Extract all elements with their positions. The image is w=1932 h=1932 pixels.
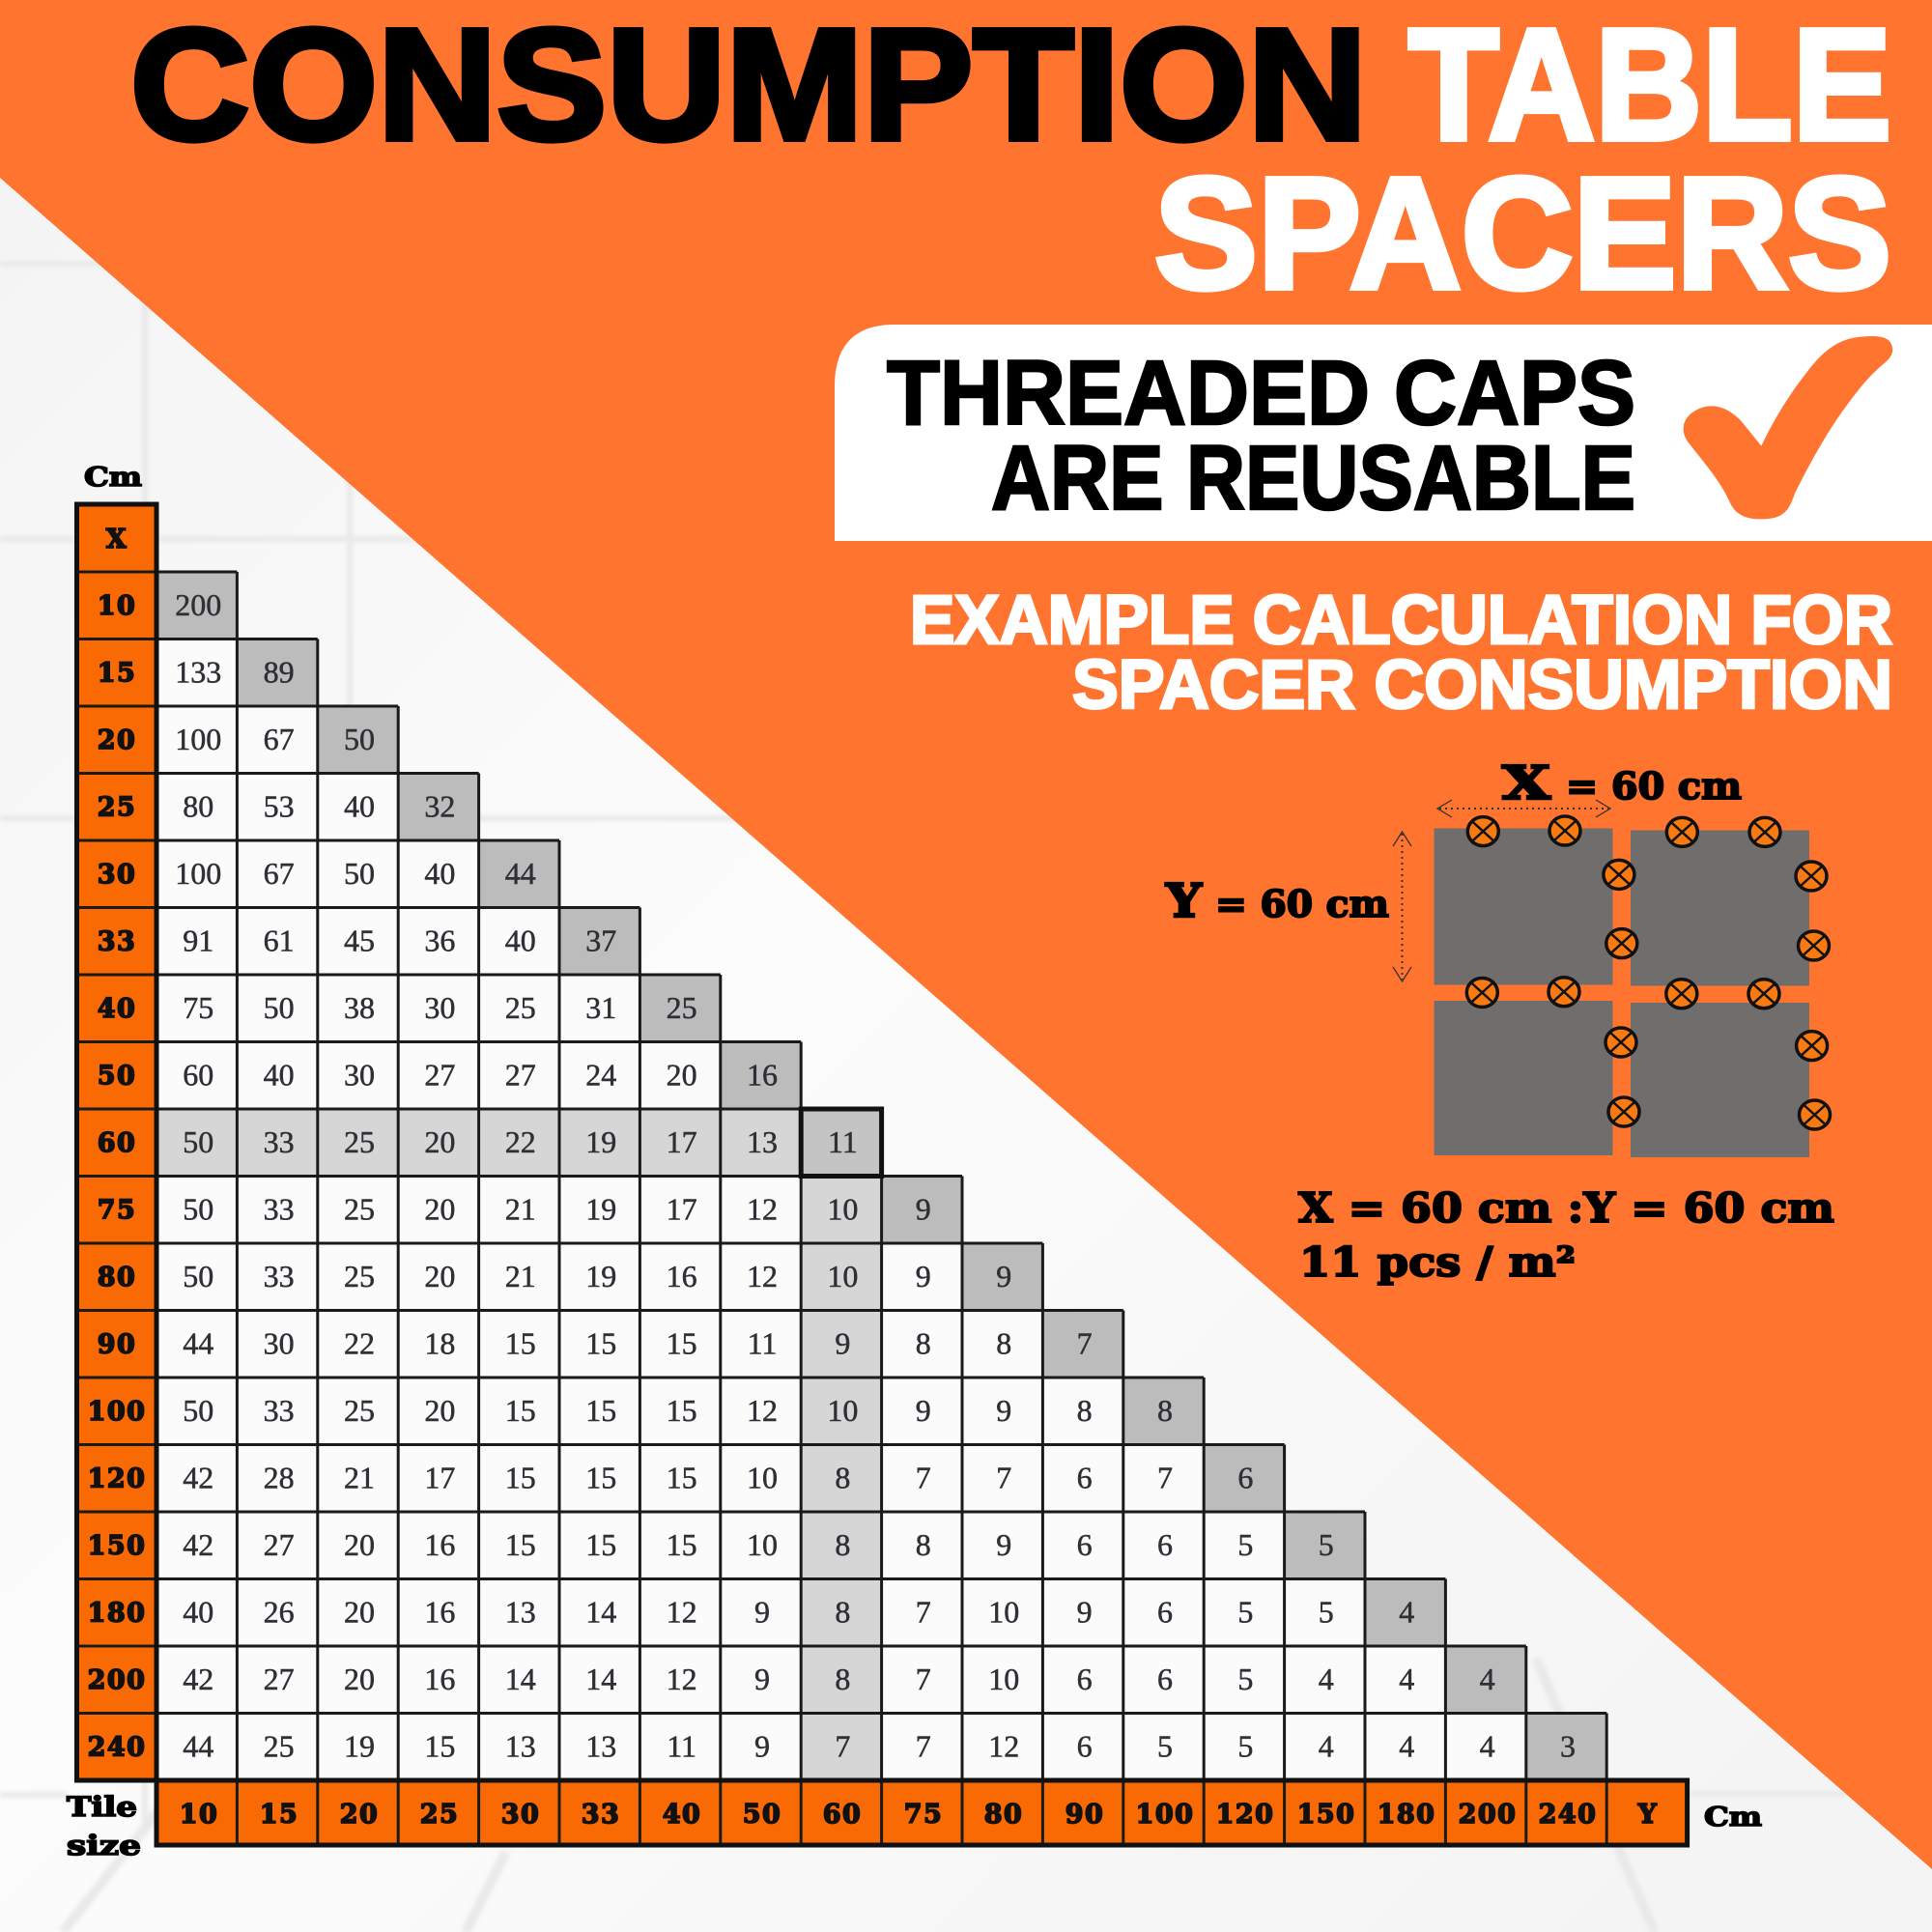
label: Y equals 60 cm: = 60 cm [1215, 882, 1389, 925]
table values: 17 [667, 1124, 697, 1159]
table values: 67 [264, 722, 295, 756]
table values: 5 [1237, 1662, 1253, 1696]
table values: 50 [183, 1124, 213, 1159]
table values: 9 [916, 1259, 931, 1293]
table values: 45 [344, 923, 375, 958]
row header column X: 180 [88, 1598, 146, 1629]
table values: 8 [1157, 1393, 1173, 1428]
table values: 5 [1319, 1527, 1334, 1562]
row header column X: 30 [98, 860, 136, 890]
table values: 42 [183, 1527, 213, 1562]
column header row Y: 10 [180, 1800, 218, 1830]
label: tile size [67, 1791, 141, 1861]
table values: 14 [585, 1594, 616, 1629]
column header row Y: 100 [1136, 1800, 1194, 1830]
table values: 25 [344, 1124, 375, 1159]
label: Cm right: Cm [1704, 1803, 1762, 1833]
table values: 9 [996, 1527, 1011, 1562]
table values: 75 [183, 990, 213, 1025]
row header column X: 90 [98, 1329, 136, 1360]
table values: 10 [988, 1662, 1019, 1696]
table values: 8 [1077, 1393, 1093, 1428]
table values: 15 [424, 1729, 455, 1764]
arrow: X dimension [1437, 800, 1610, 817]
table values: 16 [424, 1594, 455, 1629]
table values: 4 [1480, 1662, 1495, 1696]
table values: 20 [344, 1527, 375, 1562]
cell fills [156, 572, 1606, 1780]
label: tile size: Tile [67, 1791, 137, 1823]
table values [175, 587, 1576, 1764]
callout: threaded caps are reusable: THREADED CAPS [887, 342, 1635, 444]
table values: 15 [667, 1527, 697, 1562]
title: SPACERS [1154, 145, 1891, 322]
table values: 8 [835, 1527, 850, 1562]
table values: 13 [505, 1594, 536, 1629]
table values: 25 [344, 1393, 375, 1428]
row header column X: 200 [88, 1665, 146, 1695]
table values: 11 [748, 1325, 777, 1360]
table values: 6 [1237, 1461, 1253, 1495]
table values: 8 [835, 1594, 850, 1629]
table values: 6 [1077, 1729, 1093, 1764]
table values: 19 [585, 1259, 616, 1293]
table values: 16 [424, 1662, 455, 1696]
table values: 7 [996, 1461, 1011, 1495]
table values: 22 [505, 1124, 536, 1159]
title [130, 0, 1891, 322]
table values: 40 [424, 856, 455, 891]
row header column X: 40 [98, 994, 136, 1024]
table values: 40 [344, 788, 375, 823]
table values: 27 [264, 1527, 295, 1562]
table values: 9 [754, 1594, 770, 1629]
table values: 9 [835, 1325, 850, 1360]
table values: 4 [1399, 1662, 1414, 1696]
row header column X [76, 504, 156, 1780]
table values: 9 [754, 1729, 770, 1764]
row header column X: 240 [88, 1733, 146, 1762]
table values: 19 [585, 1192, 616, 1227]
title: TABLE [1408, 0, 1891, 173]
table values: 5 [1237, 1594, 1253, 1629]
table values: 15 [585, 1325, 616, 1360]
table values: 15 [585, 1527, 616, 1562]
table values: 4 [1319, 1729, 1334, 1764]
column header row Y: 15 [260, 1800, 298, 1830]
table values: 9 [1077, 1594, 1093, 1629]
row header column X: 20 [98, 725, 136, 755]
row header column X: 33 [98, 927, 136, 956]
table values: 25 [344, 1259, 375, 1293]
result: 11 pieces per square metre: X = 60 cm :Y = 60 cm [1298, 1184, 1834, 1232]
arrow: Y dimension [1393, 832, 1411, 981]
table values: 11 [667, 1729, 696, 1764]
table values: 33 [264, 1192, 295, 1227]
table values: 44 [505, 856, 536, 891]
table values: 67 [264, 856, 295, 891]
table values: 50 [344, 722, 375, 756]
table values: 91 [183, 923, 213, 958]
table values: 30 [344, 1057, 375, 1092]
table values: 33 [264, 1124, 295, 1159]
grid lines [156, 572, 1606, 1780]
table values: 20 [424, 1192, 455, 1227]
table values: 14 [585, 1662, 616, 1696]
title: CONSUMPTION [130, 0, 1367, 173]
table values: 38 [344, 990, 375, 1025]
table values: 13 [585, 1729, 616, 1764]
label: Y equals 60 cm: Y [1165, 874, 1203, 928]
table values: 5 [1237, 1527, 1253, 1562]
row header column X: 75 [98, 1196, 136, 1225]
table values: 6 [1157, 1594, 1173, 1629]
column header row Y: 33 [582, 1800, 620, 1830]
table values: 31 [585, 990, 616, 1025]
table values: 13 [505, 1729, 536, 1764]
spacer markers [1466, 816, 1830, 1129]
table values: 26 [264, 1594, 295, 1629]
table values: 15 [505, 1527, 536, 1562]
table values: 7 [916, 1729, 931, 1764]
table values: 3 [1560, 1729, 1576, 1764]
table values: 8 [996, 1325, 1011, 1360]
table values: 12 [747, 1393, 778, 1428]
table values: 10 [827, 1192, 858, 1227]
table values: 16 [424, 1527, 455, 1562]
table values: 20 [344, 1594, 375, 1629]
table values: 7 [916, 1461, 931, 1495]
column header row Y: 60 [823, 1800, 862, 1830]
table values: 12 [988, 1729, 1019, 1764]
column header row Y: 20 [340, 1800, 379, 1830]
table values: 12 [747, 1259, 778, 1293]
table values: 40 [264, 1057, 295, 1092]
tiles [1434, 829, 1809, 1157]
table values: 7 [1157, 1461, 1173, 1495]
table values: 89 [264, 655, 295, 690]
table values: 16 [747, 1057, 778, 1092]
table values: 7 [1077, 1325, 1093, 1360]
table values: 15 [505, 1325, 536, 1360]
diagram: spacer layout on four tiles [1165, 756, 1830, 1157]
table values: 4 [1399, 1594, 1414, 1629]
table values: 8 [835, 1662, 850, 1696]
row header column X: 100 [88, 1397, 146, 1427]
table values: 19 [585, 1124, 616, 1159]
table values: 8 [916, 1325, 931, 1360]
table values: 42 [183, 1662, 213, 1696]
table values: 9 [996, 1259, 1011, 1293]
table values: 37 [585, 923, 616, 958]
table values: 9 [916, 1393, 931, 1428]
table values: 6 [1077, 1461, 1093, 1495]
table values: 50 [264, 990, 295, 1025]
column header row Y: 90 [1065, 1800, 1104, 1830]
row header column X: 60 [98, 1128, 136, 1158]
table values: 10 [747, 1461, 778, 1495]
table values: 50 [183, 1192, 213, 1227]
result: 11 pieces per square metre [1298, 1184, 1834, 1286]
table values: 16 [667, 1259, 697, 1293]
heading: example calculation: SPACER CONSUMPTION [1072, 647, 1892, 724]
table values: 42 [183, 1461, 213, 1495]
row header column X: 80 [98, 1263, 136, 1293]
table values: 27 [424, 1057, 455, 1092]
table values: 9 [996, 1393, 1011, 1428]
table values: 61 [264, 923, 295, 958]
table values: 4 [1319, 1662, 1334, 1696]
table values: 100 [175, 856, 221, 891]
label: Y equals 60 cm [1165, 874, 1389, 928]
table values: 44 [183, 1325, 213, 1360]
table values: 12 [747, 1192, 778, 1227]
row header column X: 120 [88, 1464, 146, 1493]
table values: 30 [424, 990, 455, 1025]
label: X equals 60 cm: = 60 cm [1566, 764, 1742, 808]
table values: 33 [264, 1259, 295, 1293]
table values: 80 [183, 788, 213, 823]
table values: 25 [264, 1729, 295, 1764]
row header column X: 10 [98, 591, 136, 621]
column header row Y: 240 [1539, 1800, 1597, 1830]
table values: 20 [424, 1393, 455, 1428]
column header row Y: 50 [743, 1800, 781, 1830]
table values: 10 [827, 1259, 858, 1293]
table values: 8 [916, 1527, 931, 1562]
table values: 36 [424, 923, 455, 958]
row header column X: X [106, 525, 128, 554]
table values: 5 [1237, 1729, 1253, 1764]
column header row Y: 200 [1459, 1800, 1517, 1830]
callout: threaded caps are reusable: ARE REUSABLE [991, 427, 1635, 529]
table values: 15 [505, 1393, 536, 1428]
table values: 17 [424, 1461, 455, 1495]
table values: 27 [505, 1057, 536, 1092]
table values: 12 [667, 1662, 697, 1696]
table values: 32 [424, 788, 455, 823]
table values: 25 [667, 990, 697, 1025]
table values: 10 [827, 1393, 858, 1428]
table values: 21 [344, 1461, 375, 1495]
table values: 44 [183, 1729, 213, 1764]
table values: 10 [747, 1527, 778, 1562]
column header row Y: 30 [501, 1800, 540, 1830]
highlighted cell: 60 by 60 [801, 1109, 882, 1177]
table values: 19 [344, 1729, 375, 1764]
table values: 15 [585, 1393, 616, 1428]
table values: 5 [1157, 1729, 1173, 1764]
row header column X: 15 [98, 659, 136, 688]
column header row Y: 25 [420, 1800, 459, 1830]
label: X equals 60 cm: X [1502, 756, 1551, 810]
table values: 40 [505, 923, 536, 958]
heading: example calculation [910, 582, 1892, 724]
table values: 25 [344, 1192, 375, 1227]
table values: 4 [1399, 1729, 1414, 1764]
row header column X: 150 [88, 1531, 146, 1561]
table values: 15 [585, 1461, 616, 1495]
table values: 15 [667, 1461, 697, 1495]
table values: 200 [175, 587, 221, 622]
table values: 10 [988, 1594, 1019, 1629]
table values: 14 [505, 1662, 536, 1696]
table values: 4 [1480, 1729, 1495, 1764]
column header row Y: 40 [663, 1800, 701, 1830]
row header column X: 25 [98, 792, 136, 823]
table values: 13 [747, 1124, 778, 1159]
table values: 5 [1319, 1594, 1334, 1629]
column header row Y: 180 [1378, 1800, 1435, 1830]
table values: 20 [344, 1662, 375, 1696]
table values: 7 [916, 1594, 931, 1629]
table values: 27 [264, 1662, 295, 1696]
table values: 11 [828, 1124, 858, 1159]
column header row Y: 120 [1216, 1800, 1274, 1830]
table values: 50 [183, 1393, 213, 1428]
table values: 33 [264, 1393, 295, 1428]
table values: 53 [264, 788, 295, 823]
table values: 21 [505, 1192, 536, 1227]
table values: 7 [835, 1729, 850, 1764]
table values: 20 [424, 1259, 455, 1293]
table values: 20 [667, 1057, 697, 1092]
consumption table [76, 504, 1688, 1845]
table values: 40 [183, 1594, 213, 1629]
label: Cm top: Cm [84, 463, 142, 493]
column header row Y: 150 [1297, 1800, 1355, 1830]
table values: 22 [344, 1325, 375, 1360]
label: tile size: size [67, 1830, 141, 1861]
table values: 15 [505, 1461, 536, 1495]
callout: threaded caps are reusable [835, 325, 1932, 541]
table values: 6 [1157, 1527, 1173, 1562]
table values: 24 [585, 1057, 616, 1092]
table values: 9 [754, 1662, 770, 1696]
table values: 15 [667, 1393, 697, 1428]
table values: 133 [175, 655, 221, 690]
table values: 60 [183, 1057, 213, 1092]
table values: 9 [916, 1192, 931, 1227]
table values: 30 [264, 1325, 295, 1360]
table values: 50 [183, 1259, 213, 1293]
table values: 6 [1077, 1527, 1093, 1562]
label: X equals 60 cm [1502, 756, 1742, 810]
table values: 50 [344, 856, 375, 891]
table values: 100 [175, 722, 221, 756]
column header row Y: Y [1637, 1800, 1658, 1830]
result: 11 pieces per square metre: 11 pcs / m² [1299, 1238, 1576, 1286]
table values: 12 [667, 1594, 697, 1629]
table values: 15 [667, 1325, 697, 1360]
column header row Y [156, 1780, 1688, 1845]
table values: 7 [916, 1662, 931, 1696]
column header row Y: 75 [904, 1800, 943, 1830]
table values: 25 [505, 990, 536, 1025]
table values: 17 [667, 1192, 697, 1227]
table values: 21 [505, 1259, 536, 1293]
table values: 18 [424, 1325, 455, 1360]
table values: 28 [264, 1461, 295, 1495]
column header row Y: 80 [984, 1800, 1023, 1830]
heading: example calculation: EXAMPLE CALCULATION FOR [910, 582, 1892, 659]
row header column X: 50 [98, 1061, 136, 1092]
icon: check mark [1684, 336, 1892, 519]
table values: 20 [424, 1124, 455, 1159]
table values: 6 [1157, 1662, 1173, 1696]
table values: 6 [1077, 1662, 1093, 1696]
table values: 8 [835, 1461, 850, 1495]
